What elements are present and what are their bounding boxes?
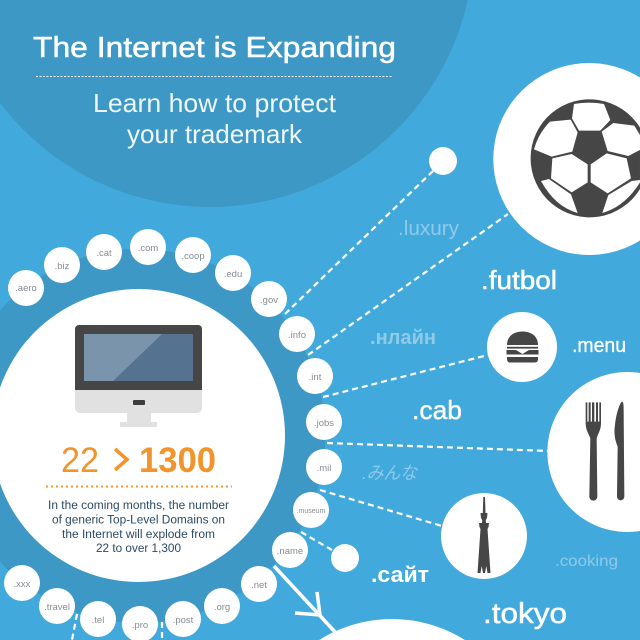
domain bubbles: .travel (44, 602, 70, 613)
central white circle (0, 289, 285, 582)
domain bubbles: .cat (96, 248, 112, 259)
icon: tower (441, 493, 527, 579)
domain bubbles: .tel (92, 615, 104, 626)
domain bubbles: .name (277, 546, 303, 557)
arrow (274, 566, 336, 633)
icon: burger (487, 312, 557, 382)
label: .cooking: .cooking (555, 553, 618, 570)
domain bubbles: .xxx (14, 579, 31, 590)
label: .menu: .menu (572, 335, 626, 357)
label: .tokyo: .tokyo (483, 598, 567, 630)
dashed connectors (72, 171, 549, 640)
subtitle: Learn how to protect (93, 88, 337, 118)
label: .онлайн: .нлайн (370, 327, 436, 349)
label: .みんな: .みんな (362, 463, 419, 483)
small white dot bottom (331, 544, 359, 572)
domain bubbles: .edu (224, 269, 242, 280)
bottom white circle (319, 619, 465, 640)
domain bubbles: .net (251, 580, 267, 591)
subtitle: your trademark (127, 119, 303, 149)
statistic: 22 to 1300 (61, 441, 216, 480)
statistic: 22 to 1300: 1300 (139, 441, 216, 480)
domain bubbles: .biz (55, 261, 70, 272)
icon: football (493, 63, 640, 255)
description text (48, 498, 229, 555)
description text: In the coming months, the number (48, 498, 229, 512)
label: .сайт: .сайт (371, 562, 429, 587)
domain bubbles: .aero (15, 283, 37, 294)
domain bubbles: .com (138, 243, 158, 254)
domain bubbles: .museum (297, 508, 326, 515)
domain bubbles: .int (309, 372, 322, 383)
domain bubbles: .info (288, 330, 306, 341)
header circle (0, 0, 474, 207)
domain bubbles: .post (173, 615, 194, 626)
small white dot top (429, 147, 457, 175)
icon: cutlery (547, 372, 640, 532)
title: The Internet is Expanding (33, 32, 396, 64)
icon: monitor (75, 325, 202, 427)
domain bubbles: .mil (317, 463, 331, 474)
dark ring (0, 249, 326, 623)
description text: the Internet will explode from (62, 527, 215, 541)
domain bubbles (4, 229, 342, 640)
subtitle (93, 88, 337, 149)
statistic: 22 to 1300: 22 (61, 441, 99, 480)
label: .futbol: .futbol (481, 265, 557, 295)
description text: of generic Top-Level Domains on (52, 512, 225, 526)
domain bubbles: .gov (260, 295, 278, 306)
description text: 22 to over 1,300 (96, 541, 181, 555)
domain bubbles: .org (214, 602, 230, 613)
domain bubbles: .coop (181, 251, 205, 262)
domain bubbles: .pro (132, 620, 148, 631)
label: .luxury: .luxury (398, 218, 459, 240)
label: .cab: .cab (412, 395, 462, 425)
domain bubbles: .jobs (314, 418, 334, 429)
